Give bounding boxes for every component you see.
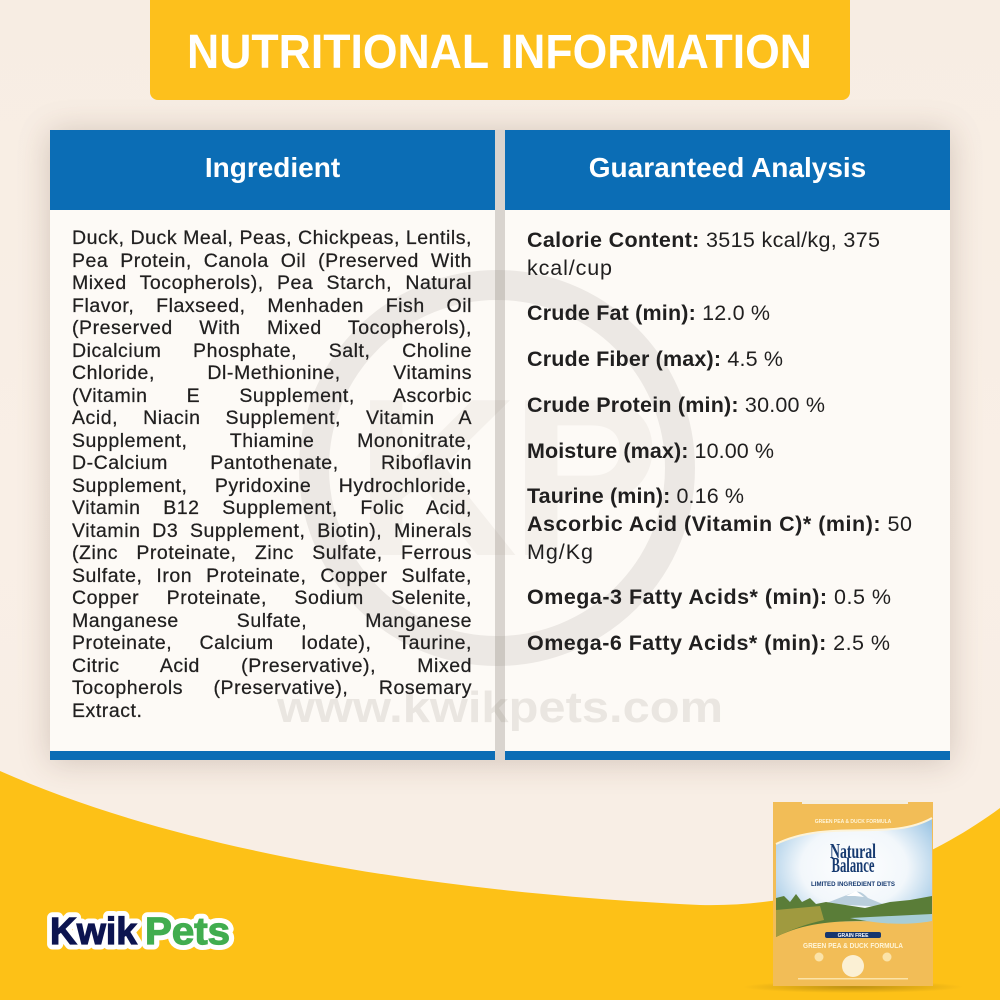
ingredient text: Mixed Tocopherols), Pea Starch, Natural (72, 272, 472, 294)
ingredient text: (Vitamin E Supplement, Ascorbic (72, 384, 472, 406)
ingredient text: Vitamin D3 Supplement, Biotin), Minerals (72, 520, 472, 542)
ingredient text: Supplement, Thiamine Mononitrate, (72, 430, 472, 452)
ingredient text: (Zinc Proteinate, Zinc Sulfate, Ferrous (72, 542, 472, 564)
watermark: P (510, 351, 660, 603)
ingredient text: Copper Proteinate, Sodium Selenite, (72, 587, 472, 609)
product bag: Natural Balance: Balance (832, 853, 874, 877)
ingredient text: Vitamin B12 Supplement, Folic Acid, (72, 497, 472, 519)
ingredient text: Extract. (72, 700, 142, 722)
logo: Kwik Pets: Pets (145, 911, 230, 953)
watermark: K (355, 351, 518, 603)
analysis text: Calorie Content: 3515 kcal/kg, 375 (527, 228, 880, 252)
ingredient text: Sulfate, Iron Proteinate, Copper Sulfate, (72, 564, 472, 586)
gutter shadow (495, 130, 505, 760)
ingredient text: Dicalcium Phosphate, Salt, Choline (72, 340, 472, 362)
panel: ingredient (50, 130, 495, 760)
analysis body background (505, 210, 950, 751)
ingredient heading: Ingredient (205, 152, 340, 183)
ingredient text: Chloride, Dl-Methionine, Vitamins (72, 362, 472, 384)
ingredient footer bar (50, 751, 495, 760)
logo: Kwik Pets: Kwik (50, 911, 138, 953)
ingredient text: Tocopherols (Preservative), Rosemary (72, 677, 472, 699)
analysis text: Omega-6 Fatty Acids* (min): 2.5 % (527, 631, 890, 655)
product bag: Natural Balance (757, 802, 948, 992)
ingredient text (72, 227, 472, 722)
ingredient heading (50, 130, 495, 210)
ingredient text: Proteinate, Calcium Iodate), Taurine, (72, 632, 472, 654)
analysis text: Crude Fiber (max): 4.5 % (527, 347, 783, 371)
ingredient text: Pea Protein, Canola Oil (Preserved With (72, 250, 472, 272)
analysis text: Mg/Kg (527, 540, 593, 564)
analysis heading: Guaranteed Analysis (589, 152, 866, 183)
ingredient text: Flavor, Flaxseed, Menhaden Fish Oil (72, 294, 472, 316)
logo: Kwik Pets: Kwik (50, 911, 138, 953)
product bag: Natural Balance: GREEN PEA & DUCK FORMULA (815, 819, 892, 825)
ingredient text: Manganese Sulfate, Manganese (72, 610, 472, 632)
product bag: Natural Balance: GREEN PEA & DUCK FORMULA (803, 943, 903, 950)
analysis text: Ascorbic Acid (Vitamin C)* (min): 50 (527, 512, 912, 536)
product bag: Natural Balance: GRAIN FREE (838, 933, 869, 939)
watermark: www.kwikpets.com (276, 683, 723, 732)
ingredient text: Duck, Duck Meal, Peas, Chickpeas, Lentils, (72, 227, 472, 249)
panel: guaranteed analysis (505, 130, 950, 760)
analysis text: Crude Protein (min): 30.00 % (527, 393, 825, 417)
analysis text: Moisture (max): 10.00 % (527, 439, 774, 463)
product bag: Natural Balance: LIMITED INGREDIENT DIETS (811, 881, 896, 888)
analysis text: Omega-3 Fatty Acids* (min): 0.5 % (527, 585, 891, 609)
analysis text: Taurine (min): 0.16 % (527, 484, 744, 508)
analysis footer bar (505, 751, 950, 760)
analysis text: kcal/cup (527, 256, 612, 280)
ingredient text: Supplement, Pyridoxine Hydrochloride, (72, 474, 472, 496)
ingredient text: Citric Acid (Preservative), Mixed (72, 654, 472, 676)
analysis heading (505, 130, 950, 210)
title banner (150, 0, 850, 100)
product bag: Natural Balance: Natural (830, 839, 876, 863)
ingredient text: Acid, Niacin Supplement, Vitamin A (72, 407, 472, 429)
logo: Kwik Pets (47, 911, 234, 953)
ingredient text: D-Calcium Pantothenate, Riboflavin (72, 452, 472, 474)
title banner: NUTRITIONAL INFORMATION (187, 26, 812, 79)
logo: Kwik Pets: Pets (145, 911, 230, 953)
analysis text: Crude Fat (min): 12.0 % (527, 301, 770, 325)
panel shadow (50, 130, 950, 760)
ingredient text: (Preserved With Mixed Tocopherols), (72, 317, 472, 339)
ingredient body background (50, 210, 495, 751)
